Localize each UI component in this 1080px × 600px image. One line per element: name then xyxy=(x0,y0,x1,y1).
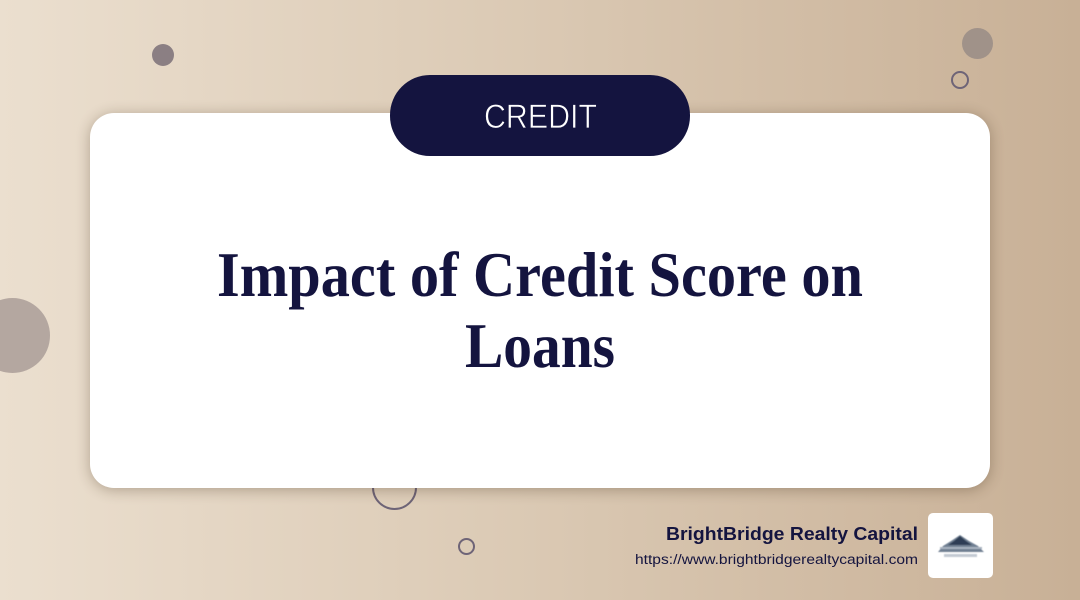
title: Loans xyxy=(465,310,615,381)
badge: credit pill xyxy=(390,75,690,156)
decorative circle: left edge xyxy=(0,298,50,373)
title xyxy=(217,239,863,381)
icon: building roof logo xyxy=(938,534,984,558)
decorative circle: top right filled xyxy=(962,28,993,59)
brand name: BrightBridge Realty Capital xyxy=(666,524,918,544)
decorative ring: bottom centre large xyxy=(372,465,417,510)
badge label: CREDIT xyxy=(484,98,597,136)
website url: https://www.brightbridgerealtycapital.com xyxy=(635,552,918,567)
title: Impact of Credit Score on xyxy=(217,239,863,310)
logo tile xyxy=(928,513,993,578)
decorative ring: top right xyxy=(951,71,969,89)
panel: main white card xyxy=(90,113,990,488)
decorative circle: top left xyxy=(152,44,174,66)
decorative ring: bottom centre small xyxy=(458,538,475,555)
